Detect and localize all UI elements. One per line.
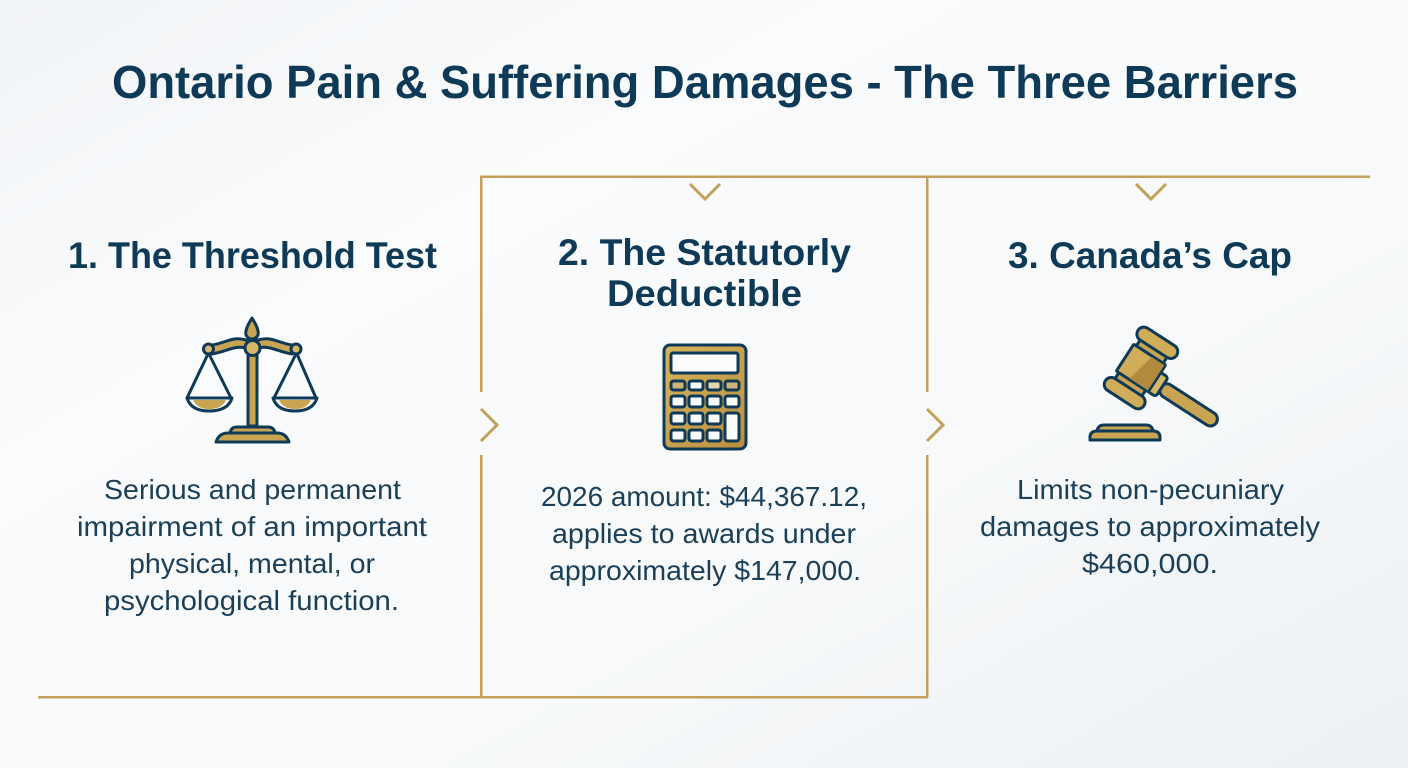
description: Limits non-pecuniary <box>1017 474 1284 505</box>
heading: 2. The Statutorly <box>558 232 851 273</box>
description: applies to awards under <box>552 518 856 549</box>
arrow: down chevron panel 3 <box>1136 184 1166 199</box>
description: psychological function. <box>104 585 399 616</box>
title: Ontario Pain & Suffering Damages - The Three Barriers <box>112 56 1298 108</box>
description: damages to approximately <box>980 511 1320 542</box>
panel: the statutorly deductible <box>541 232 867 586</box>
icon: gavel <box>1090 324 1239 450</box>
description <box>980 474 1320 579</box>
description <box>77 474 427 616</box>
panel frame lines <box>38 176 1370 698</box>
description <box>541 481 867 586</box>
description: 2026 amount: $44,367.12, <box>541 481 867 512</box>
arrow: down chevron panel 2 <box>690 184 720 199</box>
panel: the threshold test <box>68 235 437 616</box>
arrow: right chevron to panel 2 <box>481 409 497 441</box>
description: impairment of an important <box>77 511 427 542</box>
description: physical, mental, or <box>129 548 375 579</box>
heading: 3. Canada’s Cap <box>1008 235 1292 276</box>
heading: Deductible <box>607 273 802 314</box>
icon: balance scales <box>187 318 317 442</box>
description: Serious and permanent <box>104 474 401 505</box>
heading <box>558 232 851 314</box>
arrow: right chevron to panel 3 <box>927 409 943 441</box>
heading: 1. The Threshold Test <box>68 235 437 276</box>
description: approximately $147,000. <box>549 555 861 586</box>
icon: calculator <box>664 345 746 449</box>
panel: canada's cap <box>980 235 1320 579</box>
description: $460,000. <box>1082 548 1218 579</box>
